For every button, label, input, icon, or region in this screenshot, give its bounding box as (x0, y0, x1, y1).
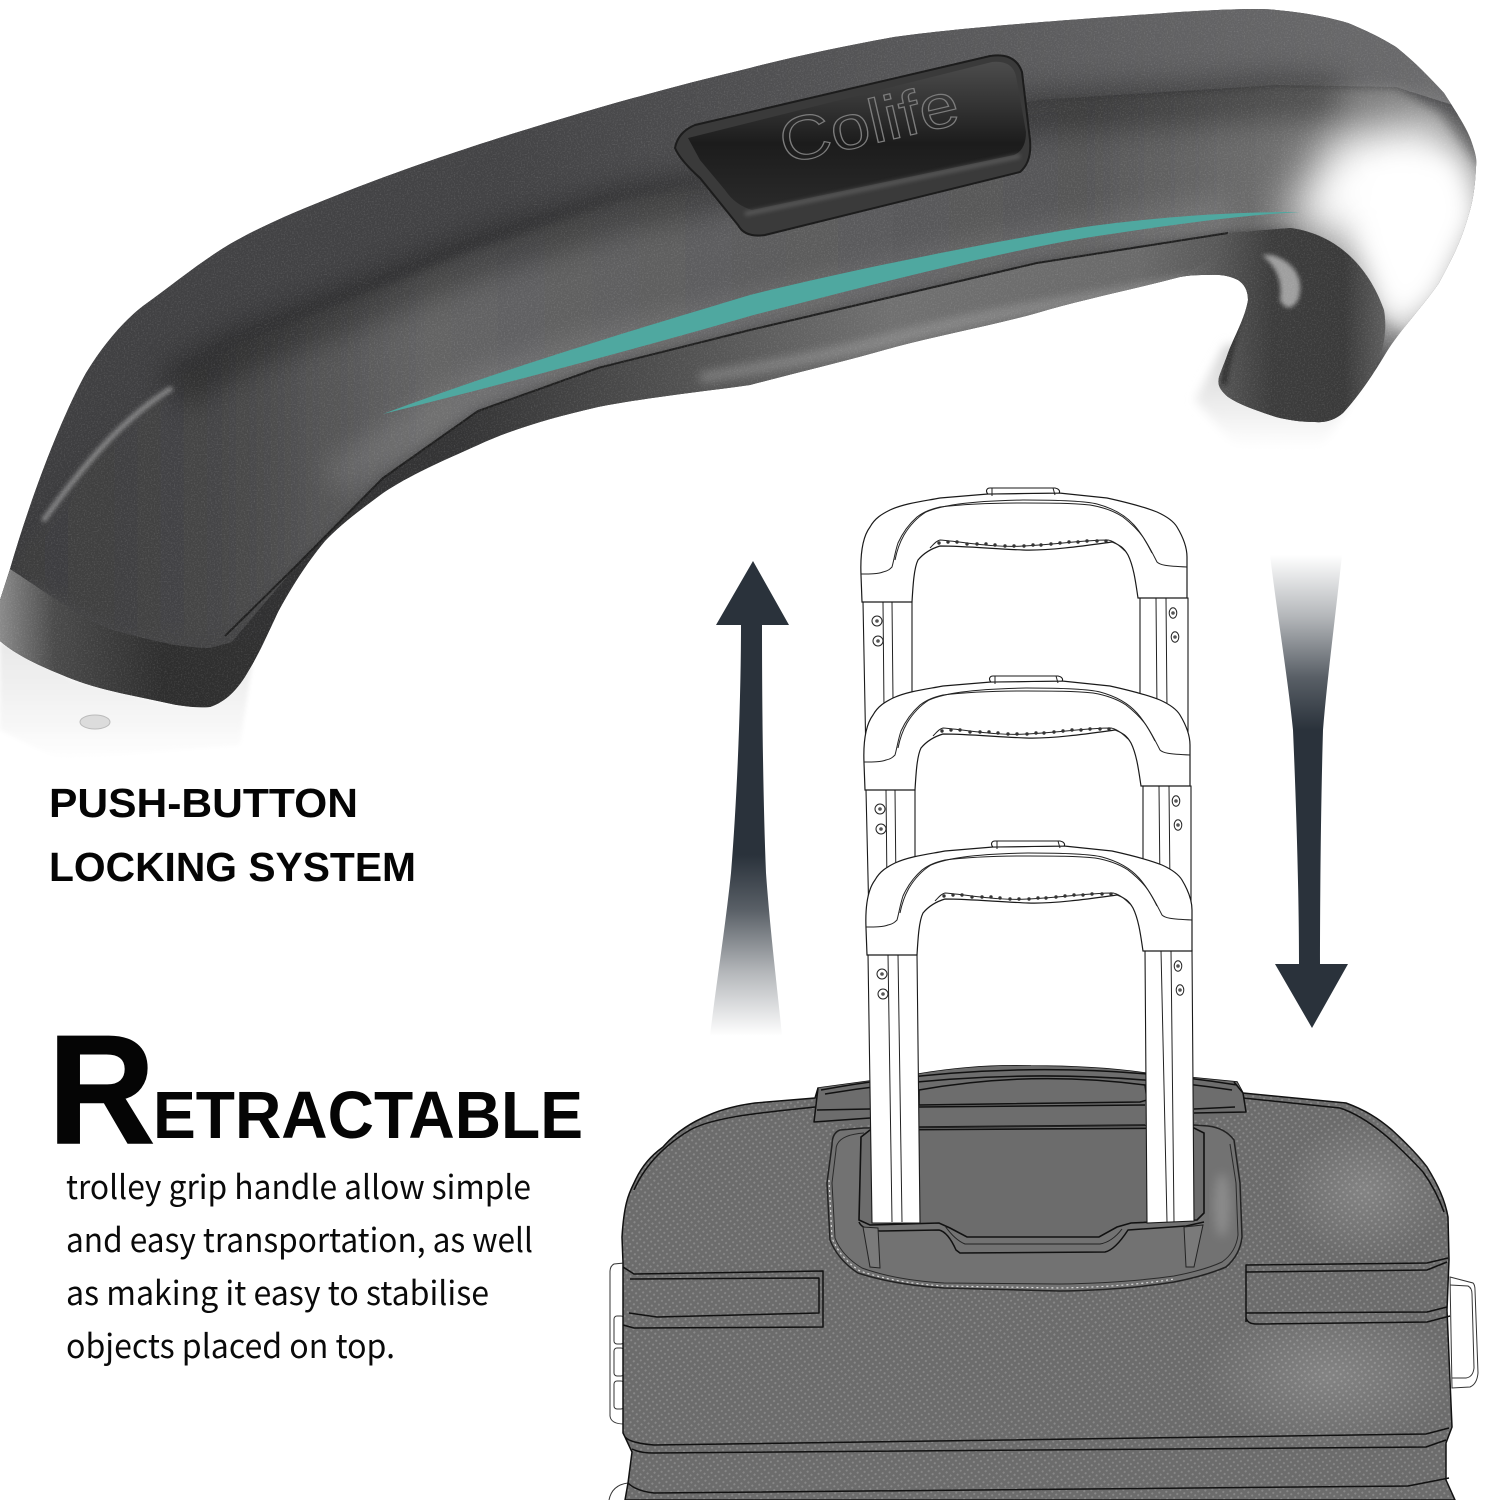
heading: retractable (48, 1003, 583, 1176)
bright highlight (1285, 120, 1485, 352)
handle recess (827, 1125, 1242, 1291)
left side recess panel (623, 1267, 823, 1328)
middle position tubes (866, 786, 1191, 920)
case shell (622, 1066, 1455, 1500)
bottom position handle (866, 841, 1192, 999)
right tube under handle (1195, 335, 1380, 448)
heading: retractable: ETRACTABLE (153, 1078, 583, 1153)
description text: trolley grip handle allow simple (66, 1161, 531, 1209)
handle body (0, 0, 1500, 720)
bolt on left tube (80, 715, 110, 729)
suitcase (609, 1066, 1478, 1500)
curved left highlight (43, 388, 172, 521)
heading: retractable: R (48, 1003, 155, 1176)
trolley line art (861, 488, 1194, 1223)
top position handle (861, 488, 1187, 646)
middle position handle (864, 676, 1190, 834)
inside bend (1180, 228, 1385, 430)
heading: push-button (49, 780, 416, 890)
shell highlights (1280, 1120, 1450, 1260)
embossed logo: Colife (773, 69, 965, 178)
top position tubes (863, 598, 1188, 760)
left tube under handle (0, 641, 252, 760)
description text: and easy transportation, as well (66, 1214, 533, 1262)
heading: push-button: PUSH-BUTTON (49, 780, 358, 826)
surface grain (0, 0, 1500, 720)
arrow: down (1270, 555, 1348, 1028)
end cap (0, 569, 265, 708)
heading: push-button: LOCKING SYSTEM (49, 844, 416, 890)
description text: as making it easy to stabilise (66, 1267, 489, 1315)
shoulder lines (634, 1098, 1444, 1212)
side wheels and lock outline (609, 1263, 1478, 1500)
ridge shadow (172, 97, 1340, 390)
right side recess panel (1246, 1258, 1450, 1324)
arrow: up (710, 561, 789, 1036)
large handle photo (0, 0, 1500, 760)
description text: objects placed on top. (66, 1320, 395, 1368)
extended tubes into case (868, 950, 1194, 1223)
top carry handle (814, 1066, 1246, 1131)
push button (675, 55, 1030, 236)
upper surface (0, 9, 1458, 652)
middle surface (10, 85, 1476, 583)
teal stripe (383, 212, 1300, 414)
lower lip (225, 228, 1300, 680)
horizontal ribs (625, 1428, 1449, 1493)
seam glow (330, 215, 1228, 480)
description text (66, 1161, 533, 1368)
